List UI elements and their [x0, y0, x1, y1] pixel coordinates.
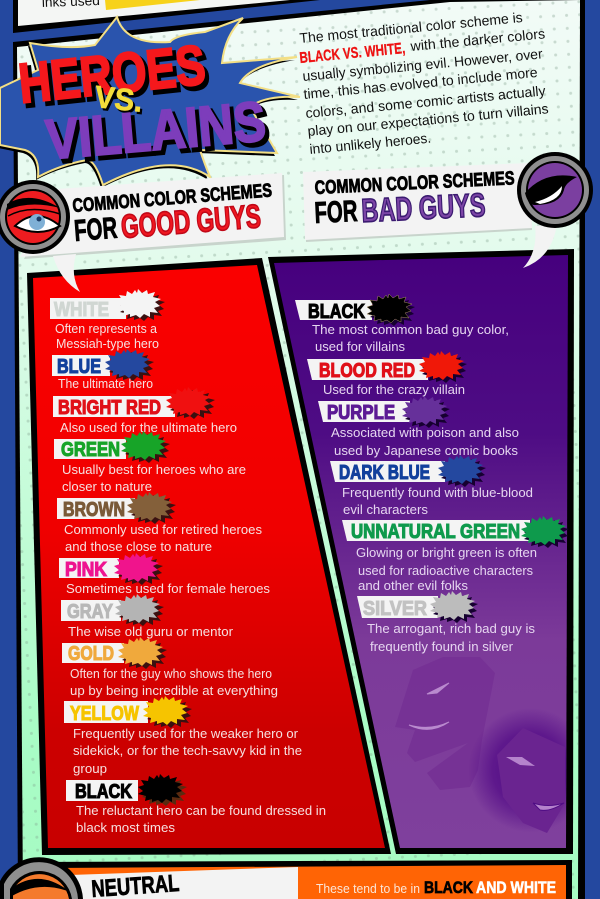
item: brown: BROWN [63, 499, 125, 521]
item: silver: frequently found in silver [370, 640, 513, 654]
item: unnatural green [342, 516, 569, 593]
item: gray: The wise old guru or mentor [68, 625, 233, 639]
title word: heroes: HEROES [16, 33, 208, 115]
intro paragraph: usually symbolizing evil. However, over [302, 45, 544, 84]
title word: vs: VS. [95, 81, 146, 121]
item: silver: The arrogant, rich bad guy is [367, 622, 535, 636]
item: black [66, 774, 326, 835]
item: black [295, 294, 509, 354]
item: gray [61, 594, 233, 639]
item: blue: BLUE [57, 356, 101, 378]
intro paragraph: BLACK VS. WHITE, [299, 40, 406, 67]
heading: common color schemes for bad guys: FOR [314, 195, 359, 230]
intro paragraph: colors, and some comic artists actually [305, 82, 546, 121]
panel: good guys colors [27, 258, 391, 855]
item: pink [59, 553, 270, 596]
item: yellow: sidekick, or for the tech-savvy kid in the [73, 744, 302, 758]
list: good guy colors [50, 289, 326, 835]
item: white: Messiah-type hero [56, 337, 159, 351]
icon: hero eye [0, 180, 70, 254]
comic burst behind title [0, 17, 300, 188]
item: dark blue: DARK BLUE [339, 462, 430, 484]
intro paragraph: with the darker colors [409, 25, 546, 54]
item: unnatural green: UNNATURAL GREEN [351, 521, 520, 543]
item: bright red: Also used for the ultimate hero [60, 421, 237, 435]
item: purple [318, 396, 519, 458]
item: green: GREEN [61, 439, 120, 461]
item: yellow [64, 696, 302, 776]
item: black: black most times [76, 821, 175, 835]
item: blue [52, 349, 154, 391]
title word: vs: VS. [93, 79, 144, 119]
item: purple: Associated with poison and also [331, 426, 519, 440]
item: blood red: BLOOD RED [319, 360, 415, 382]
item: black: BLACK [75, 781, 132, 803]
icon: villain eye [517, 152, 593, 228]
item: gold: Often for the guy who shows the hero [70, 667, 272, 681]
item: gold: GOLD [68, 643, 114, 665]
panel: neutral [24, 860, 572, 899]
title: heroes vs villains [16, 32, 271, 175]
item: green: closer to nature [62, 480, 152, 494]
item: yellow: YELLOW [70, 703, 139, 725]
item: green [54, 431, 246, 494]
item: bright red: BRIGHT RED [58, 397, 161, 419]
heading: common color schemes for bad guys: BAD GUYS [361, 186, 486, 229]
item: pink: Sometimes used for female heroes [66, 582, 270, 596]
item: black: The most common bad guy color, [312, 323, 509, 337]
heading: common color schemes for bad guys [314, 168, 515, 230]
item: blood red [307, 351, 467, 397]
item: pink: PINK [65, 559, 107, 581]
panel: bad guys colors [268, 249, 574, 854]
item: yellow: Frequently used for the weaker hero or [73, 727, 298, 741]
item: white: Often represents a [55, 322, 157, 336]
heading: common color schemes for good guys [72, 180, 273, 248]
title word: villains: VILLAINS [43, 89, 268, 171]
intro paragraph: time, this has evolved to include more [303, 64, 538, 102]
neutral description: AND WHITE [476, 878, 556, 897]
item: brown [57, 492, 262, 554]
heading: common color schemes for good guys: GOOD GUYS [120, 197, 262, 245]
item: dark blue [330, 455, 533, 517]
item: purple: used by Japanese comic books [334, 444, 518, 458]
speech bubble: bad guys [303, 163, 557, 268]
neutral description [316, 878, 556, 897]
item: silver [357, 591, 535, 654]
item: bright red [53, 387, 237, 435]
item: purple: PURPLE [327, 402, 395, 424]
item: black: used for villains [315, 340, 405, 354]
item: dark blue: evil characters [343, 503, 428, 517]
item: green: Usually best for heroes who are [62, 463, 246, 477]
item: brown: and those close to nature [65, 540, 212, 554]
item: blood red: Used for the crazy villain [323, 383, 465, 397]
item: unnatural green: used for radioactive characters [358, 564, 533, 578]
item: unnatural green: Glowing or bright green is often [356, 546, 537, 560]
intro paragraph [299, 9, 549, 157]
neutral description: BLACK [424, 878, 474, 897]
intro paragraph: into unlikely heroes. [309, 130, 432, 157]
item: white: WHITE [54, 299, 109, 321]
heading: common color schemes for bad guys: COMMON COLOR SCHEMES [314, 168, 515, 199]
item: unnatural green: and other evil folks [358, 579, 468, 593]
icon: neutral eye [0, 857, 83, 899]
item: black: BLACK [308, 301, 365, 323]
list: bad guy colors [295, 294, 569, 654]
item: gold: up by being incredible at everything [70, 684, 278, 698]
heading: common color schemes for good guys: FOR [73, 212, 119, 248]
intro paragraph: The most traditional color scheme is [299, 9, 523, 46]
heading: common color schemes for good guys: COMMON COLOR SCHEMES [72, 180, 273, 217]
title word: villains: VILLAINS [47, 93, 271, 175]
item: brown: Commonly used for retired heroes [64, 523, 262, 537]
villain silhouettes [395, 657, 566, 833]
item: gray: GRAY [67, 601, 114, 623]
item: white [50, 289, 165, 351]
title word: heroes: HEROES [19, 36, 212, 118]
speech bubble: good guys [20, 173, 286, 292]
item: dark blue: Frequently found with blue-blood [342, 486, 533, 500]
item: gold [62, 637, 278, 698]
item: yellow: group [73, 762, 107, 776]
intro paragraph: play on our expectations to turn villains [307, 100, 549, 139]
panel: previous section [13, 0, 320, 33]
item: black: The reluctant hero can be found dressed in [76, 804, 326, 818]
item: silver: SILVER [363, 598, 427, 620]
neutral description: These tend to be in [316, 881, 420, 896]
item: blue: The ultimate hero [58, 377, 153, 391]
